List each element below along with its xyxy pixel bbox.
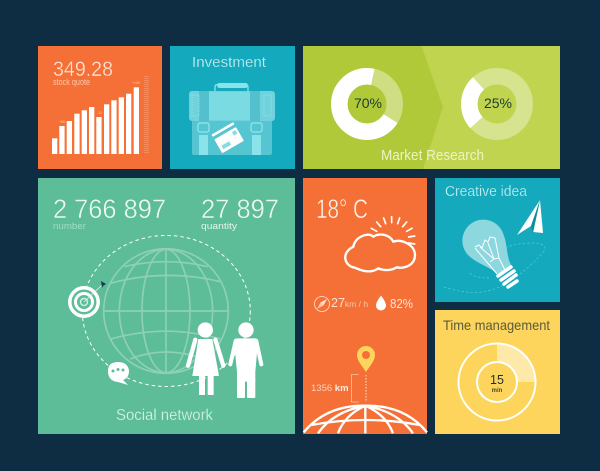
altitude dotted line — [365, 375, 367, 402]
globe — [104, 249, 228, 373]
panel: social network — [38, 178, 295, 434]
icon: water drop — [376, 296, 386, 310]
panel: market research — [303, 46, 560, 169]
panel: weather — [303, 178, 427, 434]
distance: 1356 km — [311, 383, 349, 394]
icon: speech bubble — [108, 362, 129, 385]
dashed orbit — [82, 236, 250, 386]
quantity value: 27 897 — [201, 194, 279, 224]
timer dial — [458, 344, 536, 420]
donut value: 70%: 70% — [354, 95, 382, 111]
bar value labels: +88 — [59, 120, 65, 124]
icon: compass — [314, 296, 330, 312]
market research heading: Market Research — [381, 147, 484, 164]
icon: paper plane — [517, 200, 543, 235]
temperature: 18° C — [316, 194, 368, 224]
dashed flight path — [444, 243, 545, 292]
panel: time management — [435, 310, 560, 434]
icon: briefcase — [189, 83, 275, 155]
wind speed: 27km / h — [331, 296, 368, 310]
map pin hole — [362, 351, 370, 359]
stock value: 349.28 — [53, 58, 113, 81]
altitude bracket — [352, 374, 358, 402]
social network heading: Social network — [116, 407, 214, 424]
investment heading: Investment — [192, 55, 266, 71]
bar value labels: -12 — [97, 111, 102, 115]
quantity label: quantity — [201, 221, 237, 232]
icon: light bulb — [462, 220, 517, 287]
bulb base — [498, 267, 517, 287]
icon: man — [230, 322, 261, 398]
panel: investment — [170, 46, 295, 169]
timer unit: min — [492, 388, 503, 394]
stock label: stock quote — [53, 77, 90, 87]
icon: sun rays — [371, 217, 415, 244]
donut value: 25%: 25% — [484, 95, 512, 111]
bar value labels: +100 — [132, 81, 140, 85]
time management heading: Time management — [443, 317, 550, 333]
panel: stock quote — [38, 46, 162, 169]
icon: cloud — [345, 235, 415, 271]
number label: number — [53, 221, 86, 232]
donut chart: 70% — [339, 76, 395, 132]
icon: woman — [188, 322, 223, 395]
creative idea heading: Creative idea — [445, 184, 528, 200]
icon: credit card — [211, 122, 244, 153]
donut chart: 25% — [469, 76, 525, 132]
number value: 2 766 897 — [53, 194, 166, 224]
panel: creative idea — [435, 178, 560, 302]
icon: target — [68, 281, 106, 318]
bar value labels — [59, 81, 140, 124]
bar chart — [52, 87, 139, 154]
timer value: 15 — [490, 373, 504, 387]
humidity: 82% — [390, 296, 413, 311]
bulb filament — [475, 237, 505, 274]
chart scale — [144, 76, 149, 154]
icon: map pin — [357, 346, 375, 372]
globe horizon — [304, 406, 427, 433]
